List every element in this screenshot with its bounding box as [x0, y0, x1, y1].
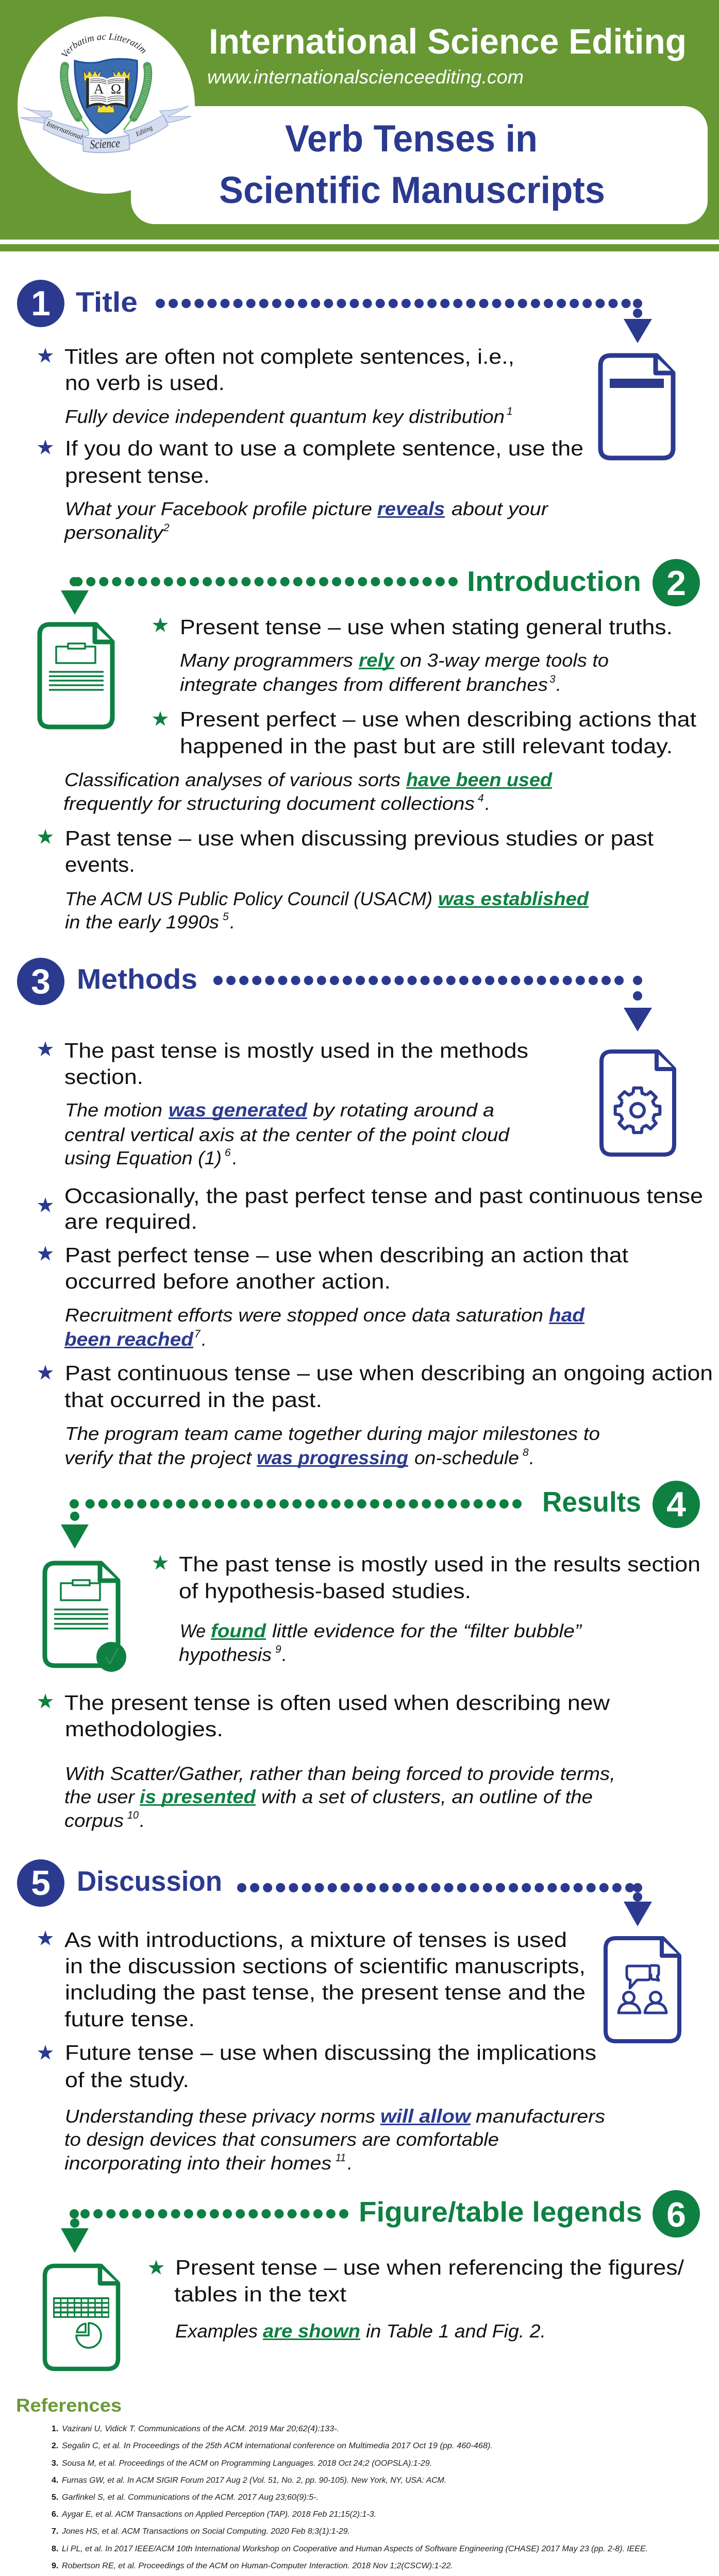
text block: introduction bullets: .: [230, 911, 235, 933]
text block: methods bullets: by rotating around a: [313, 1099, 494, 1121]
text block: methods bullets: 6: [225, 1147, 231, 1159]
text block: results bullets: The present tense is often used when describing new: [64, 1691, 610, 1715]
number badge 1: 1: [31, 284, 51, 323]
logo: crest: A: [94, 81, 104, 97]
text block: results bullets: methodologies.: [65, 1717, 223, 1741]
website address: www.internationalscienceediting.com: [207, 66, 524, 88]
text block: methods bullets: on-schedule: [414, 1447, 519, 1468]
text block: methods bullets: Past continuous tense – use when describing an ongoing action: [65, 1361, 713, 1385]
logo: crest: International: [45, 120, 83, 142]
main title: Verb Tenses in: [285, 118, 538, 160]
text block: results bullets: .: [140, 1810, 145, 1831]
reference list: Garfinkel S, et al. Communications of the ACM. 2017 Aug 23;60(9):5-.: [62, 2493, 319, 2502]
text block: discussion bullets: [38, 1928, 605, 2174]
text block: discussion bullets: Future tense – use when discussing the implications: [65, 2041, 596, 2064]
text block: title bullets: present tense.: [65, 464, 210, 487]
text block: methods bullets: was progressing: [257, 1447, 408, 1468]
text block: introduction bullets: on 3-way merge tools to: [400, 650, 609, 671]
reference list: 7.: [52, 2527, 58, 2536]
text block: methods bullets: 7: [194, 1328, 201, 1340]
panel: figure and table legends section: [45, 2190, 700, 2369]
text block: methods bullets: central vertical axis at the center of the point cloud: [64, 1124, 510, 1145]
heading: Methods: Methods: [77, 963, 197, 995]
main title: [219, 118, 605, 211]
text block: results bullets: .: [282, 1644, 287, 1665]
heading: Title: Title: [76, 286, 138, 318]
text block: legend bullet: tables in the text: [174, 2282, 347, 2306]
reference list: Jones HS, et al. ACM Transactions on Social Computing. 2020 Feb 8;3(1):1-29.: [61, 2527, 350, 2536]
arrow: dotted connector: [218, 976, 652, 1031]
text block: methods bullets: been reached: [64, 1329, 194, 1350]
arrow: dotted connector: [242, 1883, 652, 1926]
arrow: dotted connector: [61, 1499, 517, 1549]
text block: methods bullets: .: [529, 1447, 534, 1468]
text block: results bullets: [38, 1552, 700, 1831]
text block: introduction bullets: .: [556, 674, 561, 695]
number badge 4: [653, 1481, 700, 1528]
text block: methods bullets: .: [232, 1147, 238, 1168]
text block: introduction bullets: in the early 1990s: [65, 911, 219, 933]
text block: methods bullets: The motion: [65, 1099, 162, 1121]
text block: methods bullets: The past tense is mostly used in the methods: [64, 1039, 528, 1062]
heading: Introduction: Introduction: [467, 565, 641, 597]
text block: results bullets: the user: [64, 1786, 136, 1807]
text block: introduction bullets: frequently for structuring document collections: [63, 793, 475, 814]
text block: results bullets: corpus: [64, 1810, 124, 1831]
text block: discussion bullets: manufacturers: [476, 2106, 605, 2127]
text block: results bullets: hypothesis: [179, 1644, 272, 1665]
text block: methods bullets: Occasionally, the past perfect tense and past continuous tense: [64, 1184, 703, 1208]
number badge 6: 6: [666, 2195, 686, 2234]
text block: title bullets: Titles are often not complete sentences, i.e.,: [64, 345, 514, 368]
logo: crest: Ω: [111, 81, 121, 97]
icon: document with title bar: [600, 355, 673, 458]
reference list: 5.: [52, 2493, 58, 2502]
text block: introduction bullets: integrate changes from different branches: [180, 674, 548, 695]
text block: results bullets: With Scatter/Gather, rather than being forced to provide terms,: [65, 1763, 615, 1784]
text block: results bullets: is presented: [140, 1786, 256, 1807]
text block: methods bullets: .: [202, 1329, 207, 1350]
text block: title bullets: reveals: [377, 498, 445, 519]
text block: legend bullet: Present tense – use when referencing the figures/: [175, 2256, 684, 2279]
text block: results bullets: 9: [275, 1643, 281, 1655]
number badge 6: [653, 2190, 700, 2238]
reference list: Robertson RE, et al. Proceedings of the ACM on Human-Computer Interaction. 2018 Nov 1;2(CSCW):1-22.: [62, 2562, 453, 2570]
text block: discussion bullets: future tense.: [64, 2007, 195, 2031]
logo: crest: Verbatim ac Litteratim: [61, 33, 145, 57]
main title: Scientific Manuscripts: [219, 170, 605, 211]
number badge 3: [17, 958, 64, 1005]
reference list: 3.: [52, 2459, 58, 2468]
text block: title bullets: [38, 345, 583, 543]
text block: title bullets: about your: [452, 498, 549, 519]
text block: introduction bullets: was established: [438, 888, 589, 909]
text block: introduction bullets: Present perfect – use when describing actions that: [180, 707, 697, 731]
text block: results bullets: with a set of clusters, an outline of the: [261, 1786, 593, 1807]
text block: results bullets: little evidence for the “filter bubble”: [272, 1620, 582, 1641]
arrow: dotted connector: [160, 299, 652, 343]
text block: discussion bullets: Understanding these privacy norms: [65, 2106, 375, 2127]
text block: discussion bullets: including the past tense, the present tense and the: [65, 1980, 586, 2004]
reference list: Segalin C, et al. In Proceedings of the 25th ACM international conference on Multimedia 2017 Oct 19 (pp. 460-468).: [62, 2442, 493, 2450]
heading: References: References: [16, 2395, 122, 2416]
text block: methods bullets: [38, 1039, 713, 1468]
number badge 4: 4: [666, 1485, 686, 1524]
text block: title bullets: What your Facebook profile picture: [65, 498, 372, 519]
text block: methods bullets: are required.: [64, 1210, 197, 1233]
text block: results bullets: of hypothesis-based studies.: [179, 1579, 471, 1603]
panel: results section: [38, 1481, 700, 1831]
heading: organisation name: International Science Editing: [209, 22, 687, 61]
text block: title bullets: no verb is used.: [65, 371, 225, 395]
text block: methods bullets: occurred before another action.: [65, 1269, 391, 1293]
panel: references: [16, 2395, 648, 2576]
icon: document with clipboard: [40, 624, 112, 727]
icon: document with gear: [601, 1052, 674, 1155]
text block: results bullets: 10: [127, 1809, 139, 1821]
text block: legend bullet: Examples: [175, 2320, 258, 2342]
text block: methods bullets: that occurred in the past.: [64, 1388, 322, 1412]
text block: discussion bullets: 11: [336, 2152, 346, 2164]
heading: Results: Results: [542, 1486, 641, 1518]
text block: discussion bullets: incorporating into their homes: [64, 2153, 331, 2174]
text block: title bullets: personality: [64, 522, 164, 543]
text block: title bullets: Fully device independent quantum key distribution: [65, 406, 505, 427]
text block: methods bullets: The program team came together during major milestones to: [65, 1423, 600, 1444]
reference list: Aygar E, et al. ACM Transactions on Applied Perception (TAP). 2018 Feb 21;15(2):1-3.: [61, 2510, 376, 2519]
text block: discussion bullets: in the discussion sections of scientific manuscripts,: [65, 1954, 586, 1978]
icon: document with check badge: [45, 1563, 126, 1672]
reference list: 4.: [52, 2476, 58, 2485]
text block: introduction bullets: rely: [359, 650, 396, 671]
text block: introduction bullets: 4: [478, 792, 484, 804]
text block: methods bullets: Past perfect tense – use when describing an action that: [65, 1243, 629, 1267]
reference list: Furnas GW, et al. In ACM SIGIR Forum 2017 Aug 2 (Vol. 51, No. 2, pp. 90-105). New York, NY, USA: ACM.: [62, 2476, 446, 2485]
reference list: 6.: [52, 2510, 58, 2519]
logo: crest: [21, 33, 191, 154]
text block: title bullets: 2: [163, 522, 170, 534]
text block: methods bullets: using Equation (1): [64, 1147, 222, 1168]
reference list: 2.: [52, 2442, 58, 2450]
text block: introduction bullets: have been used: [406, 769, 553, 790]
text block: methods bullets: verify that the project: [64, 1447, 253, 1468]
arrow: dotted connector: [61, 2209, 344, 2253]
icon: document with speakers: [606, 1938, 679, 2041]
text block: results bullets: We: [180, 1620, 206, 1641]
panel: discussion section: [17, 1859, 679, 2174]
logo: crest: Editing: [134, 124, 154, 138]
reference list: 8.: [52, 2545, 58, 2553]
text block: discussion bullets: will allow: [380, 2106, 472, 2127]
text block: introduction bullets: events.: [65, 853, 135, 876]
text block: methods bullets: was generated: [169, 1099, 308, 1121]
text block: methods bullets: Recruitment efforts were stopped once data saturation: [65, 1304, 543, 1326]
reference list: Vazirani U, Vidick T. Communications of the ACM. 2019 Mar 20;62(4):133-.: [62, 2425, 339, 2433]
heading: Discussion: Discussion: [77, 1865, 222, 1897]
number badge 2: 2: [666, 564, 686, 603]
text block: discussion bullets: .: [347, 2153, 353, 2174]
text block: legend bullet: [148, 2256, 684, 2342]
text block: introduction bullets: Present tense – use when stating general truths.: [180, 615, 673, 639]
text block: results bullets: found: [211, 1620, 266, 1641]
text block: introduction bullets: 5: [223, 911, 229, 923]
text block: introduction bullets: happened in the past but are still relevant today.: [180, 734, 673, 758]
number badge 3: 3: [31, 962, 51, 1001]
text block: introduction bullets: The ACM US Public Policy Council (USACM): [65, 888, 432, 909]
header banner: [0, 0, 719, 251]
text block: results bullets: The past tense is mostly used in the results section: [179, 1552, 700, 1576]
icon: document with table and pie chart: [45, 2266, 118, 2369]
reference list: Li PL, et al. In 2017 IEEE/ACM 10th International Workshop on Cooperative and Human Aspects of Software Engineering (CHASE) 2017 May 23 (pp. 2-8). IEEE.: [62, 2545, 648, 2553]
text block: methods bullets: had: [549, 1304, 585, 1326]
text block: introduction bullets: Classification analyses of various sorts: [64, 769, 400, 790]
number badge 1: [17, 280, 64, 327]
number badge 5: 5: [31, 1863, 51, 1903]
text block: introduction bullets: 3: [549, 673, 556, 685]
reference list: [52, 2425, 648, 2576]
heading: Figure/table legends: Figure/table legends: [359, 2196, 642, 2228]
number badge 5: [17, 1859, 64, 1907]
text block: title bullets: 1: [507, 405, 513, 417]
text block: title bullets: If you do want to use a complete sentence, use the: [65, 436, 583, 460]
text block: discussion bullets: to design devices that consumers are comfortable: [64, 2129, 499, 2150]
logo: crest: Science: [90, 137, 121, 151]
number badge 2: [653, 559, 700, 606]
panel: title section: [17, 280, 673, 543]
text block: discussion bullets: As with introductions, a mixture of tenses is used: [64, 1928, 567, 1952]
text block: introduction bullets: .: [485, 793, 490, 814]
panel: introduction section: [38, 559, 700, 933]
text block: legend bullet: are shown: [263, 2320, 360, 2342]
reference list: 9.: [52, 2562, 58, 2570]
panel: methods section: [17, 958, 713, 1468]
arrow: dotted connector: [61, 577, 453, 615]
reference list: Sousa M, et al. Proceedings of the ACM on Programming Languages. 2018 Oct 24;2 (OOPSLA):1-29.: [62, 2459, 432, 2468]
text block: methods bullets: 8: [523, 1447, 529, 1459]
text block: introduction bullets: Past tense – use when discussing previous studies or past: [65, 826, 654, 850]
reference list: 1.: [52, 2425, 58, 2433]
text block: introduction bullets: [38, 615, 697, 933]
text block: discussion bullets: of the study.: [65, 2068, 189, 2092]
text block: methods bullets: section.: [64, 1065, 143, 1089]
text block: legend bullet: in Table 1 and Fig. 2.: [366, 2320, 546, 2342]
text block: introduction bullets: Many programmers: [180, 650, 353, 671]
